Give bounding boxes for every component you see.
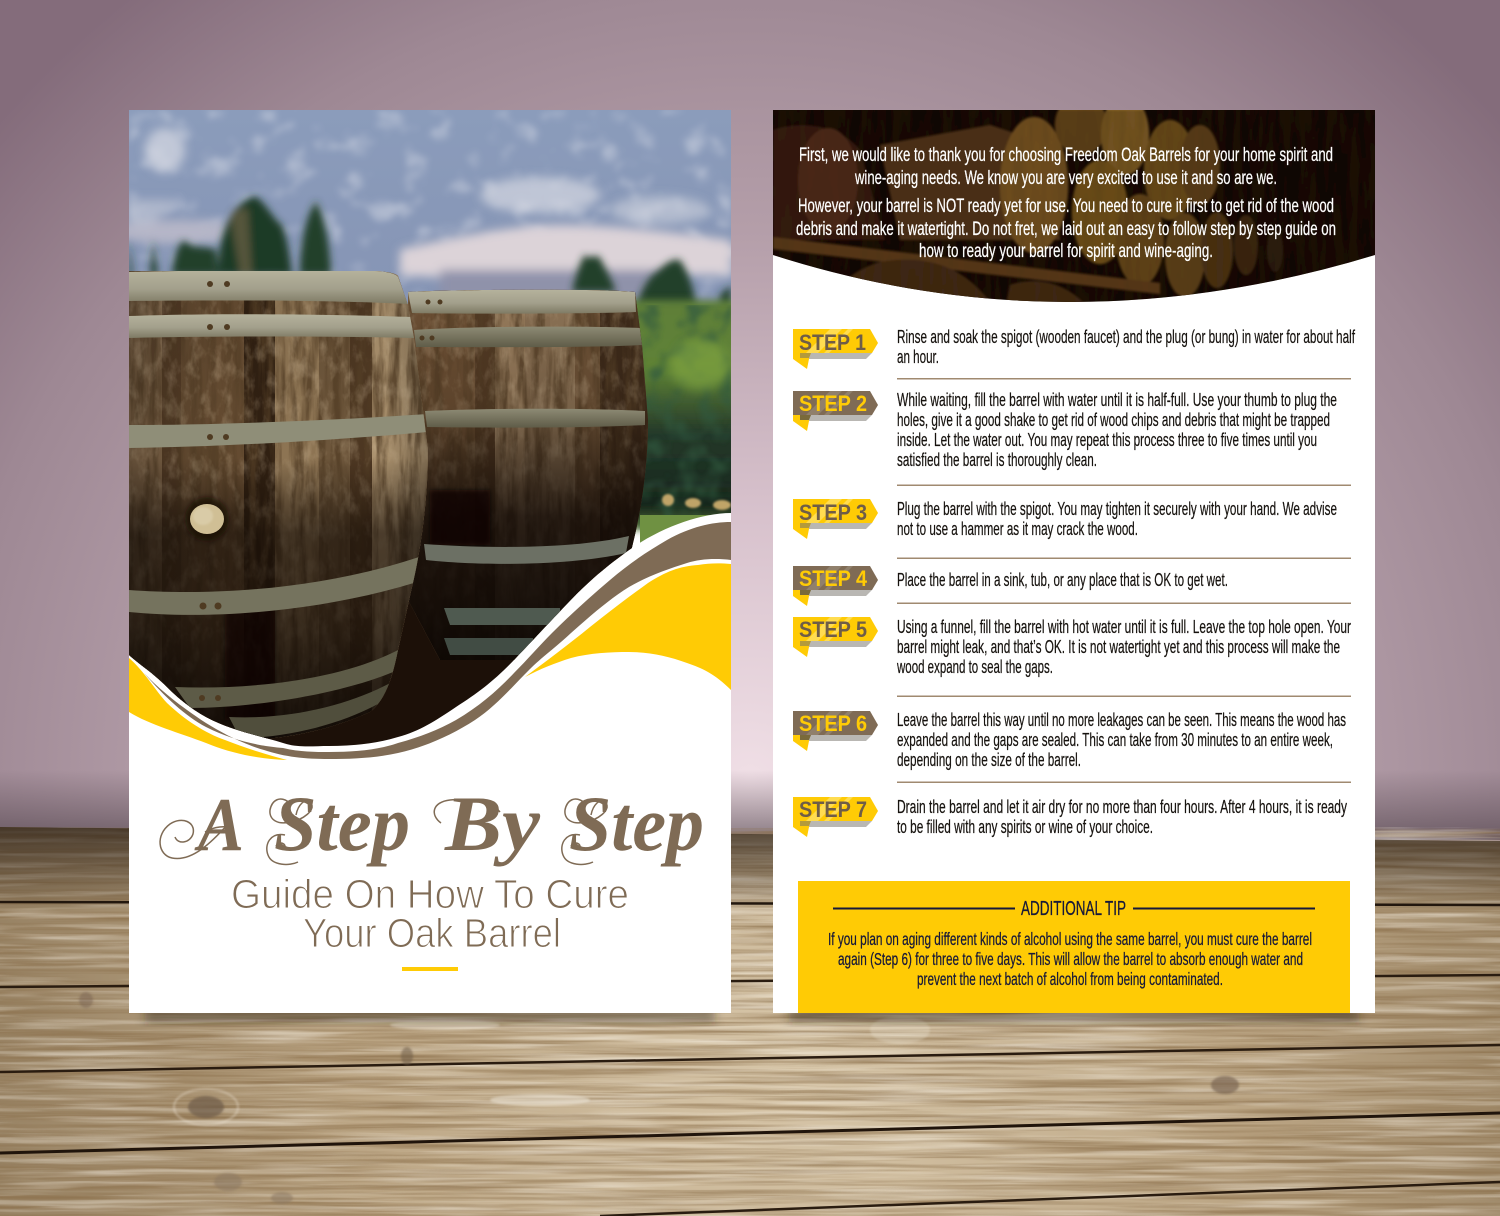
subtitle: Guide On How To Cure bbox=[231, 871, 629, 917]
step 3 text: not to use a hammer as it may crack the wood. bbox=[897, 519, 1138, 539]
step 3 badge bbox=[793, 499, 878, 539]
title: By bbox=[444, 780, 540, 867]
tip heading: ADDITIONAL TIP bbox=[1021, 898, 1126, 920]
step 4 text: Place the barrel in a sink, tub, or any place that is OK to get wet. bbox=[897, 570, 1228, 590]
step 7 badge: STEP 7 bbox=[799, 797, 867, 822]
subtitle: Your Oak Barrel bbox=[303, 910, 561, 956]
step 6 text: depending on the size of the barrel. bbox=[897, 750, 1081, 770]
panel: left cover page bbox=[110, 110, 745, 1013]
step 2 text bbox=[897, 390, 1337, 470]
page shadows bbox=[145, 1006, 1359, 1022]
dark floor under barrels bbox=[129, 590, 649, 760]
title: Step bbox=[274, 780, 410, 867]
step 1 badge: STEP 1 bbox=[799, 330, 866, 355]
swoosh: brown wave bbox=[144, 522, 731, 759]
swoosh: left yellow wave bbox=[129, 658, 287, 760]
distant trees bbox=[129, 196, 731, 320]
panel: right instructions page bbox=[773, 95, 1375, 1013]
title flourishes bbox=[160, 799, 607, 864]
green bushes bbox=[635, 294, 731, 536]
bung bbox=[185, 497, 229, 541]
step 5 text: wood expand to seal the gaps. bbox=[896, 657, 1053, 677]
step 6 badge bbox=[793, 711, 878, 751]
step 6 text bbox=[897, 710, 1346, 770]
yellow accent bar bbox=[402, 967, 458, 971]
step 6 badge: STEP 6 bbox=[799, 711, 867, 736]
step 3 badge: STEP 3 bbox=[799, 500, 867, 525]
step 7 text bbox=[897, 797, 1347, 837]
swoosh: right yellow wave bbox=[525, 563, 731, 690]
step 5 badge: STEP 5 bbox=[799, 617, 867, 642]
header photo: barrel cellar bbox=[773, 110, 1375, 302]
step 2 badge: STEP 2 bbox=[799, 391, 867, 416]
wall background bbox=[0, 0, 1500, 840]
step 4 badge: STEP 4 bbox=[799, 566, 868, 591]
intro text: how to ready your barrel for spirit and wine-aging. bbox=[919, 241, 1213, 262]
step 7 badge bbox=[793, 797, 878, 837]
step 5 badge bbox=[793, 617, 878, 657]
back barrel bbox=[400, 285, 650, 665]
front barrel bbox=[129, 270, 430, 740]
rivets bbox=[199, 281, 230, 701]
title bbox=[160, 780, 704, 867]
panel: additional tip bbox=[798, 881, 1350, 1013]
intro text bbox=[796, 145, 1336, 262]
step 1 text bbox=[897, 327, 1356, 367]
intro text: wine-aging needs. We know you are very excited to use it and so are we. bbox=[854, 168, 1277, 189]
tip text: prevent the next batch of alcohol from being contaminated. bbox=[917, 969, 1223, 989]
wooden floor bbox=[0, 827, 1500, 1216]
step 2 badge bbox=[793, 391, 878, 431]
tip text bbox=[828, 929, 1312, 989]
title: Step bbox=[569, 780, 704, 867]
barrel hoops bbox=[129, 270, 408, 304]
step 3 text bbox=[897, 499, 1337, 539]
title: A bbox=[194, 783, 244, 867]
step 7 text: to be filled with any spirits or wine of your choice. bbox=[897, 817, 1153, 837]
step 1 text: an hour. bbox=[897, 347, 939, 367]
step 2 text: satisfied the barrel is thoroughly clean. bbox=[897, 450, 1097, 470]
step 4 badge bbox=[793, 566, 878, 606]
subtitle bbox=[231, 871, 629, 956]
step 1 badge bbox=[793, 329, 878, 369]
cover photo: barrels in vineyard bbox=[110, 110, 745, 760]
step 5 text bbox=[896, 617, 1351, 677]
